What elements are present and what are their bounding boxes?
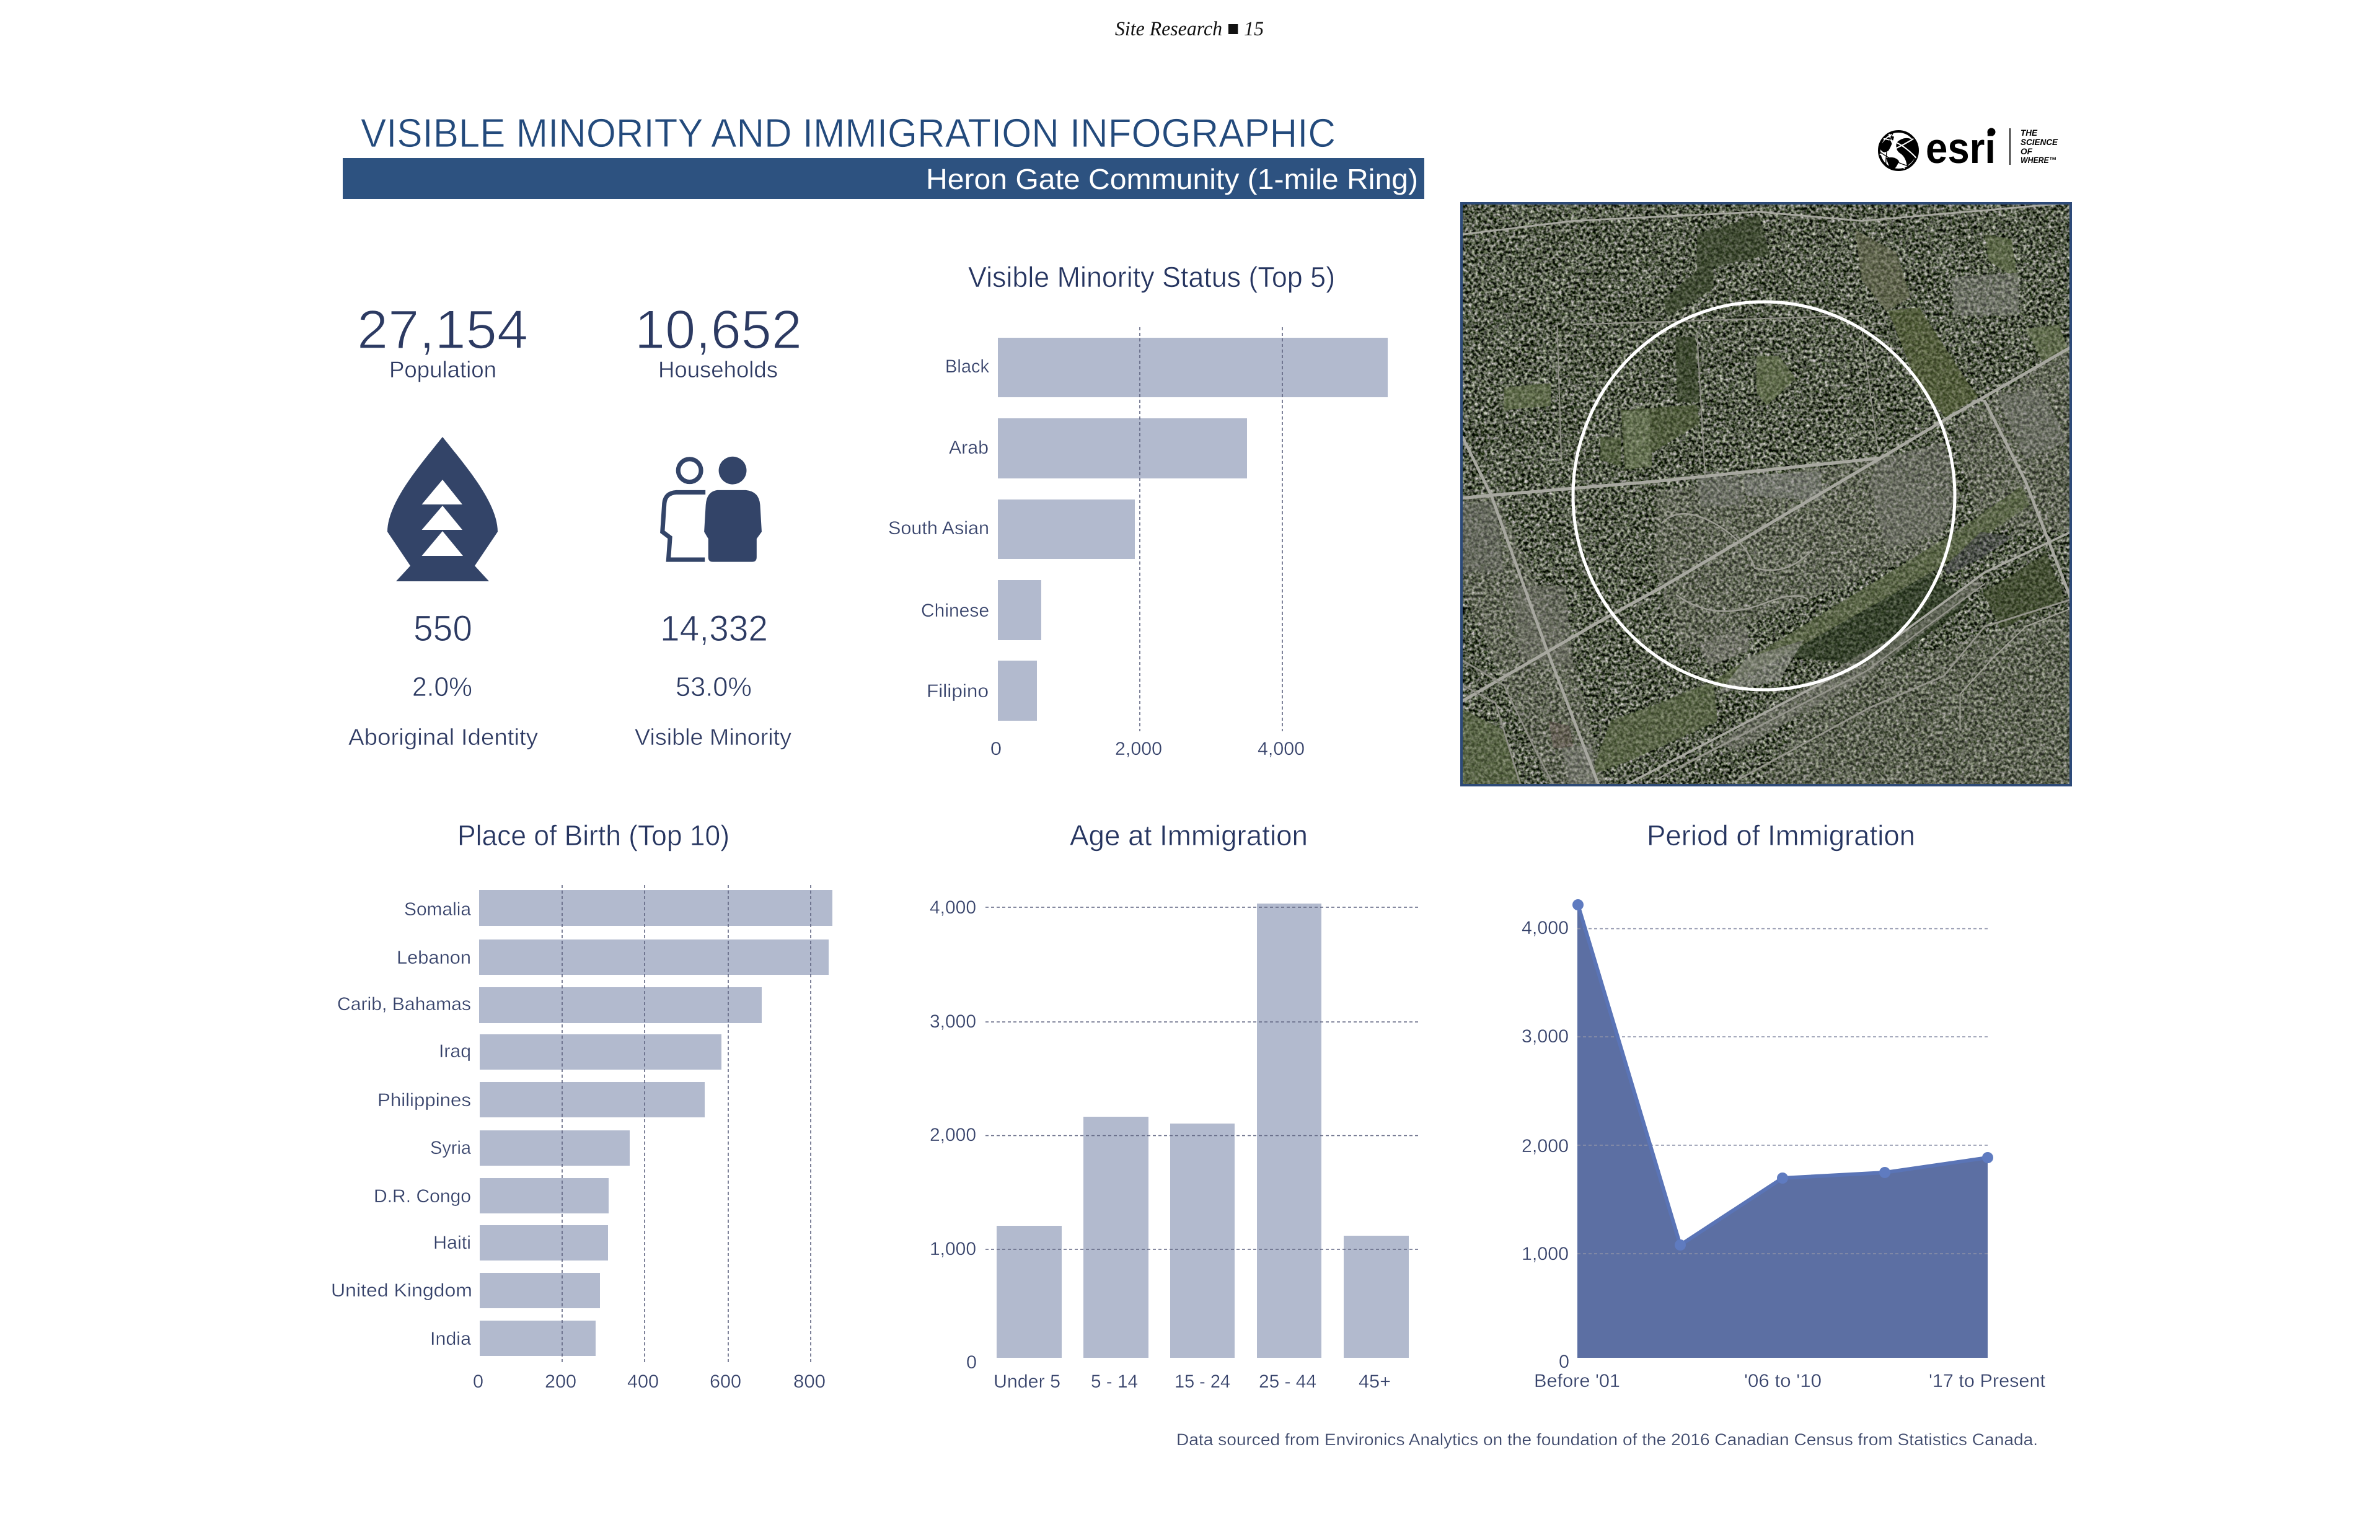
- category labels: Philippines: [377, 1090, 471, 1111]
- category labels: Chinese: [921, 601, 989, 621]
- street patterns: [1460, 202, 2073, 785]
- panel: aerial map with 1-mile ring: [1460, 202, 2073, 786]
- stat: aboriginal identity: 2.0%: [412, 672, 472, 702]
- chart: age at immigration: [930, 819, 1420, 1392]
- value labels: [1522, 918, 1569, 1372]
- category labels: India: [430, 1329, 471, 1349]
- category labels: [331, 899, 472, 1349]
- value labels: 3,000: [1522, 1026, 1569, 1047]
- icon: esri logo: THE: [2021, 128, 2038, 138]
- axis labels: 200: [545, 1371, 576, 1392]
- value labels: [930, 897, 977, 1373]
- category labels: Under 5: [994, 1371, 1060, 1392]
- axis labels: [990, 739, 1305, 759]
- icon: esri logo: SCIENCE: [2021, 137, 2058, 147]
- stat: aboriginal identity: Aboriginal Identity: [348, 724, 539, 750]
- stat: aboriginal identity: 550: [413, 609, 472, 649]
- lighter built-up zones: [1463, 347, 2071, 785]
- value labels: 4,000: [930, 897, 976, 918]
- axis labels: 4,000: [1258, 739, 1305, 759]
- category labels: Iraq: [439, 1041, 471, 1062]
- axis labels: [473, 1371, 826, 1392]
- category labels: [994, 1371, 1391, 1392]
- road network: [1463, 203, 2071, 784]
- page header: Site Research 15: Site Research ■ 15: [1115, 18, 1264, 40]
- chart: place of birth: [331, 819, 832, 1392]
- stat: population: Population: [389, 357, 496, 382]
- icon: visible minority people: [663, 457, 762, 562]
- stat: visible minority: 14,332: [660, 609, 768, 649]
- title: VISIBLE MINORITY AND IMMIGRATION INFOGRAPHIC: [361, 110, 1336, 156]
- chart: period of immigration: [1522, 819, 2046, 1391]
- chart: visible minority status: [888, 261, 1388, 759]
- area: [1577, 905, 1988, 1358]
- axis labels: 2,000: [1115, 739, 1162, 759]
- value labels: 4,000: [1522, 918, 1569, 938]
- bars: [479, 890, 832, 1356]
- value labels: 1,000: [930, 1239, 976, 1259]
- category labels: Syria: [430, 1138, 471, 1158]
- category labels: Arab: [949, 438, 989, 458]
- period labels: Before '01: [1534, 1371, 1620, 1391]
- category labels: 15 - 24: [1175, 1371, 1230, 1392]
- subtitle banner: [343, 158, 1424, 199]
- category labels: Black: [945, 356, 990, 377]
- period labels: '06 to '10: [1744, 1371, 1822, 1391]
- icon: esri logo: WHERE™: [2021, 155, 2056, 165]
- category labels: 25 - 44: [1259, 1371, 1316, 1392]
- stat: population: 27,154: [357, 299, 528, 360]
- stat: visible minority: 53.0%: [676, 672, 752, 702]
- category labels: Lebanon: [397, 948, 471, 968]
- value labels: 2,000: [1522, 1136, 1569, 1156]
- category labels: Filipino: [927, 681, 989, 702]
- value labels: 0: [966, 1352, 977, 1373]
- heading: Age at Immigration: [1070, 819, 1308, 851]
- value labels: 2,000: [930, 1125, 976, 1145]
- category labels: D.R. Congo: [374, 1186, 471, 1207]
- icon: esri logo: OF: [2021, 146, 2032, 156]
- line and points: [1572, 899, 1993, 1251]
- stat: visible minority: Visible Minority: [635, 724, 792, 750]
- heading: Period of Immigration: [1647, 819, 1915, 851]
- axis labels: 600: [710, 1371, 741, 1392]
- icon: esri logo: [1878, 128, 2058, 171]
- value labels: 0: [1559, 1352, 1569, 1372]
- axis labels: 0: [990, 739, 1002, 759]
- icon: esri logo: esri: [1926, 124, 1996, 172]
- axis labels: 400: [627, 1371, 659, 1392]
- map land cover: [1460, 202, 2073, 785]
- source footnote: Data sourced from Environics Analytics on the foundation of the 2016 Canadian Census from Statistics Canada.: [1176, 1430, 2038, 1449]
- bars: [998, 338, 1388, 721]
- axis labels: 0: [473, 1371, 483, 1392]
- stat: households: Households: [658, 357, 778, 382]
- bars: [997, 904, 1409, 1358]
- category labels: [888, 356, 990, 702]
- 1-mile ring: [1573, 302, 1955, 690]
- forests and fields: [1460, 216, 2069, 785]
- value labels: 3,000: [930, 1011, 976, 1032]
- category labels: Carib, Bahamas: [337, 994, 471, 1014]
- heading: Visible Minority Status (Top 5): [968, 261, 1335, 293]
- category labels: South Asian: [888, 518, 989, 539]
- period labels: [1534, 1371, 2046, 1391]
- subtitle banner: Heron Gate Community (1-mile Ring): [926, 163, 1418, 195]
- category labels: 5 - 14: [1091, 1371, 1138, 1392]
- category labels: United Kingdom: [331, 1280, 472, 1301]
- icon: aboriginal identity arrowhead: [387, 437, 498, 581]
- stat: aboriginal identity: [348, 609, 539, 750]
- category labels: Haiti: [433, 1233, 471, 1253]
- built-up and industrial areas: [1463, 273, 2067, 784]
- heading: Place of Birth (Top 10): [457, 819, 729, 851]
- stat: visible minority: [635, 609, 792, 750]
- category labels: 45+: [1359, 1371, 1391, 1392]
- axis labels: 800: [793, 1371, 826, 1392]
- category labels: Somalia: [404, 899, 471, 920]
- panel: key statistics: [348, 299, 802, 750]
- stat: households: 10,652: [635, 299, 802, 360]
- value labels: 1,000: [1522, 1244, 1569, 1264]
- period labels: '17 to Present: [1929, 1371, 2046, 1391]
